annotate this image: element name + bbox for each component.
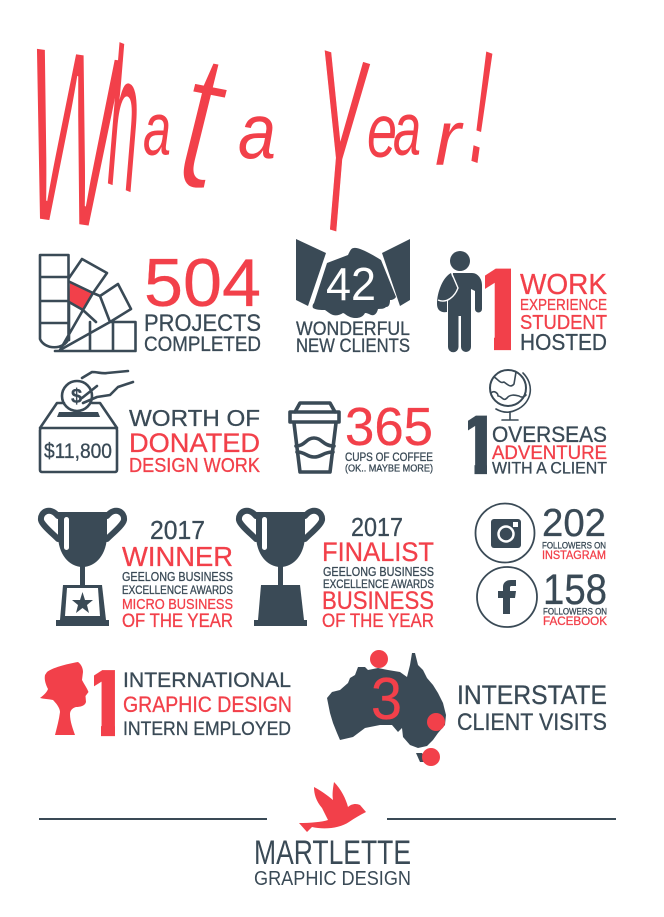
label: wonderful: WONDERFUL: [296, 319, 410, 340]
label: student: STUDENT: [520, 312, 607, 334]
icon: coffee cup: [290, 403, 339, 472]
panel: work experience student: [437, 251, 607, 352]
label: geelong business: GEELONG BUSINESS: [122, 569, 233, 584]
label: projects: PROJECTS: [144, 310, 261, 337]
label: with a client: WITH A CLIENT: [492, 460, 607, 478]
stat: 202: 202: [542, 502, 606, 545]
title: h: [103, 4, 156, 229]
title: W: [22, 0, 132, 276]
panel: footer logo: [39, 782, 616, 890]
label: facebook: FACEBOOK: [543, 614, 607, 628]
label: adventure: ADVENTURE: [492, 443, 607, 464]
logo name: MARTLETTE: [254, 834, 411, 872]
stat: 1: 1: [467, 244, 533, 376]
box amount: $11,800: [44, 440, 112, 463]
title: a: [238, 87, 276, 175]
label: worth of: WORTH OF: [129, 405, 260, 431]
panel: instagram followers: [476, 502, 606, 562]
stat: 365: 365: [345, 397, 433, 457]
panel: projects completed: [40, 245, 261, 356]
icon: colour swatch fan: [40, 255, 136, 351]
label: completed: COMPLETED: [144, 332, 261, 356]
stat: 42: 42: [326, 258, 376, 310]
panel: overseas adventure: [468, 369, 607, 474]
icon: student with bag: [437, 251, 482, 352]
title: a: [143, 87, 171, 171]
panel: wonderful new clients: [296, 239, 410, 357]
label: excellence awards: EXCELLENCE AWARDS: [122, 583, 233, 597]
label: instagram: INSTAGRAM: [542, 548, 606, 562]
label: work: WORK: [520, 269, 608, 301]
icon: australia map: [327, 650, 446, 766]
panel: interstate client visits: [327, 650, 607, 766]
label: excellence awards: EXCELLENCE AWARDS: [323, 577, 434, 591]
label: business: BUSINESS: [322, 587, 434, 615]
title: [22, 0, 508, 286]
icon: facebook: [477, 567, 537, 627]
icon: globe: [490, 370, 530, 420]
title: a: [393, 87, 421, 171]
logo subtitle: GRAPHIC DESIGN: [254, 868, 411, 890]
label: maybe more: (OK.. MAYBE MORE): [345, 462, 433, 474]
panel: winner award: [41, 511, 233, 632]
label: hosted: HOSTED: [520, 329, 607, 355]
title: t: [168, 6, 244, 233]
panel: international intern: [40, 662, 290, 736]
stat: 504: 504: [144, 245, 261, 321]
panel: finalist award: [239, 511, 434, 632]
label: interstate: INTERSTATE: [457, 680, 607, 710]
label: international: INTERNATIONAL: [123, 669, 291, 692]
title: r: [435, 94, 464, 182]
icon: martlet bird: [299, 782, 366, 832]
title: e: [367, 89, 397, 173]
label: intern employed: INTERN EMPLOYED: [123, 718, 291, 740]
icon: finalist trophy: [239, 511, 322, 626]
coin dollar sign: $: [71, 386, 82, 408]
label: cups of coffee: CUPS OF COFFEE: [345, 450, 433, 464]
label: of the year: OF THE YEAR: [122, 611, 233, 632]
label: followers on: FOLLOWERS ON: [542, 540, 606, 550]
panel: facebook followers: [477, 566, 607, 628]
icon: winner trophy: [41, 511, 124, 626]
icon: donation box: [40, 371, 133, 472]
label: of the year: OF THE YEAR: [322, 611, 434, 632]
panel: cups of coffee: [290, 397, 433, 474]
panel: donated design work: [40, 371, 261, 477]
label: design work: DESIGN WORK: [129, 455, 261, 477]
label: experience: EXPERIENCE: [520, 297, 607, 314]
label: followers on: FOLLOWERS ON: [543, 606, 607, 616]
label: finalist: FINALIST: [322, 537, 434, 567]
icon: instagram: [476, 504, 534, 562]
icon: woman silhouette: [40, 662, 88, 735]
stat: 3: 3: [371, 666, 402, 732]
stat: 1: 1: [79, 650, 133, 757]
icon: handshake: [296, 239, 410, 318]
label: geelong business: GEELONG BUSINESS: [323, 564, 434, 579]
stat: 1: 1: [456, 398, 502, 492]
label: new clients: NEW CLIENTS: [296, 336, 410, 357]
year: 2017: [351, 512, 403, 542]
label: winner: WINNER: [122, 541, 233, 572]
year: 2017: [150, 515, 205, 545]
label: donated: DONATED: [129, 428, 260, 458]
label: micro business: MICRO BUSINESS: [122, 596, 233, 613]
title: !: [464, 12, 508, 197]
label: graphic design: GRAPHIC DESIGN: [123, 692, 292, 717]
title: Y: [307, 0, 387, 286]
label: client visits: CLIENT VISITS: [457, 709, 607, 736]
stat: 158: 158: [543, 566, 607, 614]
label: overseas: OVERSEAS: [492, 422, 607, 447]
